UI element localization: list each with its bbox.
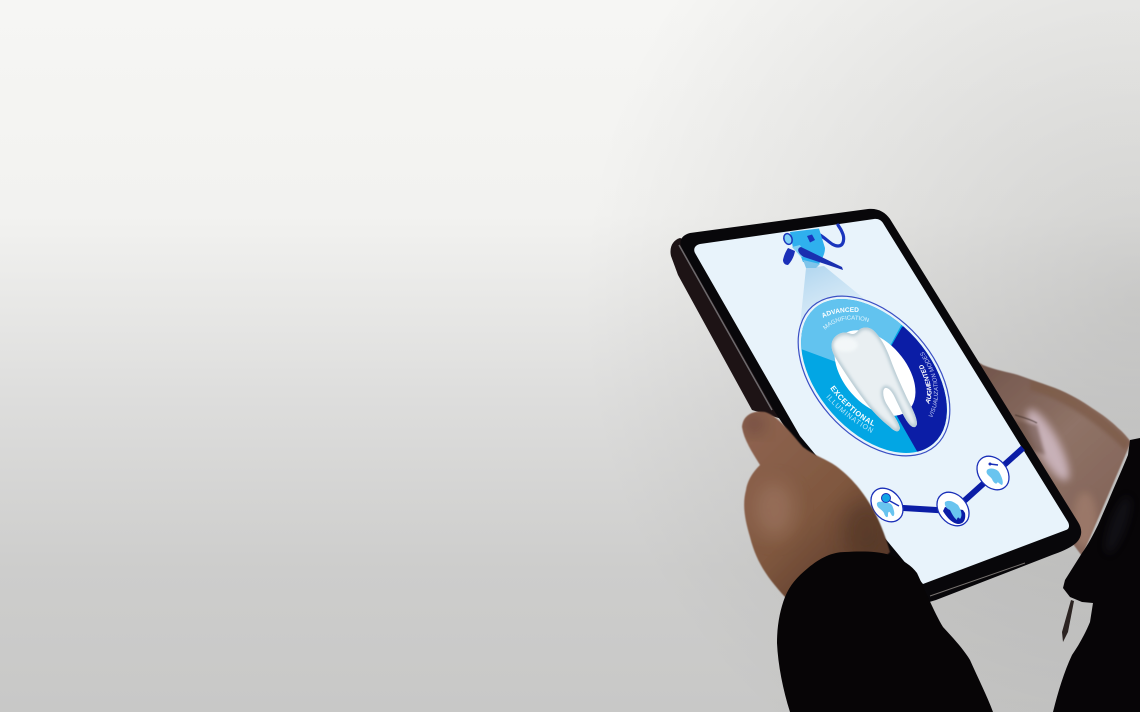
tablet bbox=[670, 209, 1081, 603]
icon: water level tooth step bbox=[930, 486, 976, 532]
disc center bbox=[819, 315, 931, 431]
light beam bbox=[798, 266, 890, 345]
left sleeve bbox=[777, 551, 993, 712]
icon: dental loupe camera bbox=[782, 225, 844, 270]
label: exceptional illumination: ILLUMINATION bbox=[826, 394, 874, 433]
icon: toothbrush tooth step bbox=[970, 450, 1016, 496]
icon: magnifier tooth step bbox=[864, 482, 910, 528]
icon: tooth bbox=[832, 328, 917, 432]
label: advanced magnification: ADVANCED bbox=[822, 307, 859, 318]
label: advanced magnification bbox=[822, 307, 870, 330]
timeline connector bbox=[887, 448, 1023, 511]
label: advanced magnification: MAGNIFICATION bbox=[822, 316, 870, 330]
disc outline bbox=[768, 267, 980, 485]
disc segments bbox=[801, 299, 947, 453]
tablet screen bbox=[694, 219, 1069, 584]
label: exceptional illumination: EXCEPTIONAL bbox=[830, 385, 874, 426]
label: augmented visualization modes bbox=[919, 352, 938, 417]
label: augmented visualization modes: VISUALIZATION MODES™ bbox=[920, 352, 938, 417]
side highlight bbox=[679, 245, 772, 410]
bezel highlight bbox=[930, 563, 1025, 596]
left hand with thumb bbox=[742, 412, 890, 600]
right hand behind tablet bbox=[978, 362, 1131, 556]
right sleeve bbox=[1053, 438, 1140, 712]
panel: circular diagram bbox=[798, 296, 950, 456]
label: augmented visualization modes: AUGMENTED bbox=[919, 365, 932, 404]
tablet bezel bbox=[680, 209, 1081, 603]
tablet side edge bbox=[670, 238, 785, 420]
zipper pull bbox=[1062, 600, 1074, 642]
